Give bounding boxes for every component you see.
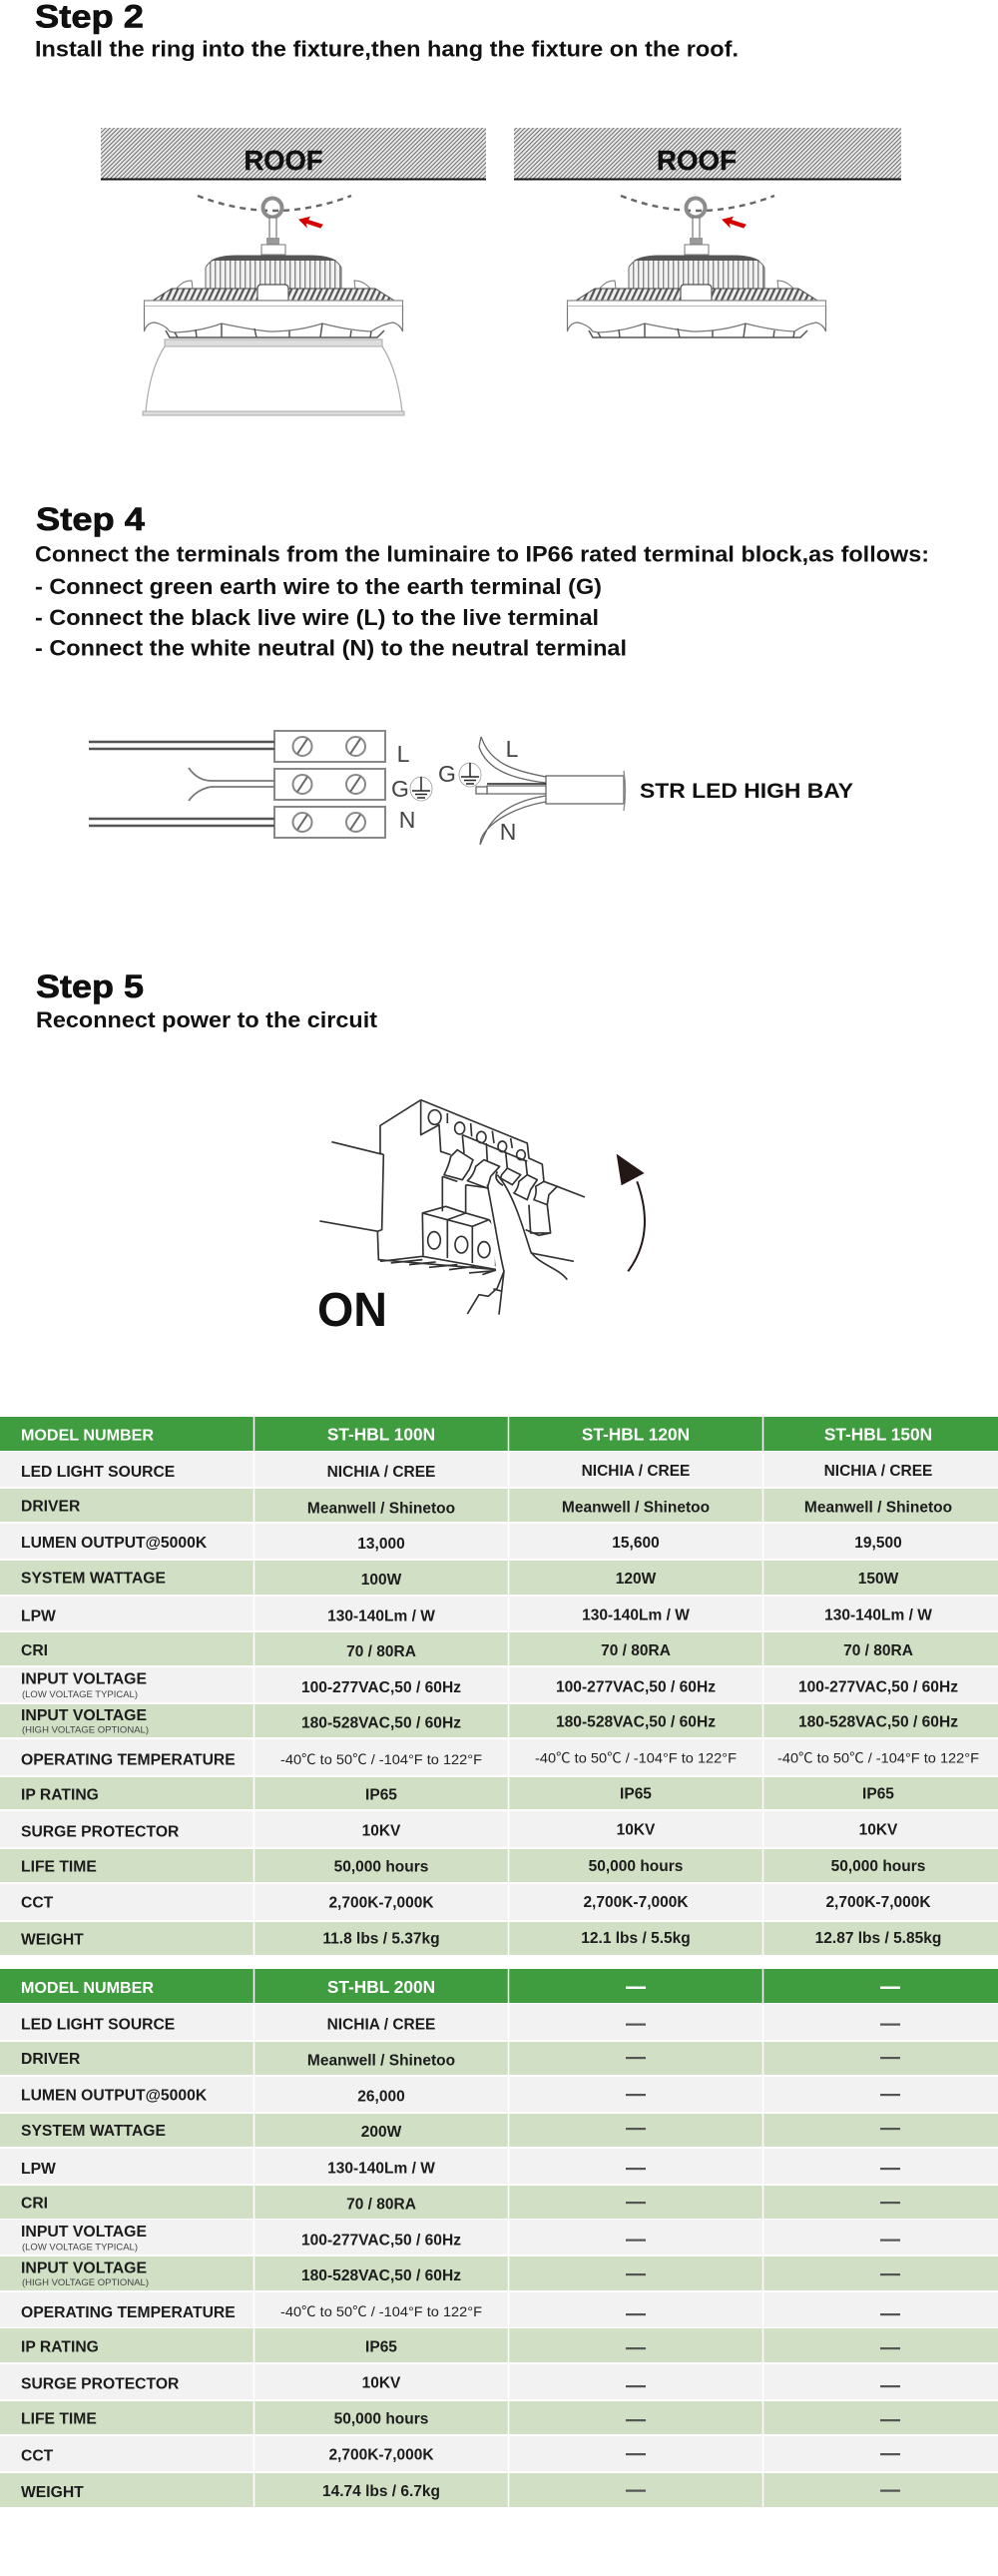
row: system wattage xyxy=(0,2114,998,2147)
row: input voltage low xyxy=(0,1667,998,1702)
row: LED light source: LED LIGHT SOURCE xyxy=(21,2017,175,2033)
row: driver: Meanwell / Shinetoo xyxy=(562,1500,710,1516)
row: weight: 12.1 lbs / 5.5kg xyxy=(581,1930,691,1947)
row: operating temperature: -40℃ to 50℃ / -104°F to 122°F xyxy=(777,1749,979,1765)
row: LED light source xyxy=(0,2004,998,2040)
row: CRI xyxy=(0,1632,998,1665)
row: input voltage high: INPUT VOLTAGE xyxy=(21,2260,147,2276)
wire labels: G xyxy=(438,761,456,787)
row: life time: 50,000 hours xyxy=(831,1858,925,1875)
heading: Step 4: Step 4 xyxy=(36,501,145,537)
row: weight: 12.87 lbs / 5.85kg xyxy=(815,1930,941,1947)
row: LPW xyxy=(0,2149,998,2184)
header row: ST-HBL 100N xyxy=(327,1424,435,1444)
table: specifications ST-HBL 200N xyxy=(0,1969,998,2507)
row: operating temperature xyxy=(0,2292,998,2327)
row: CRI: 70 / 80RA xyxy=(601,1642,671,1659)
heading: Step 5: Step 5 xyxy=(36,968,144,1004)
row: weight xyxy=(0,1922,998,1955)
row: operating temperature: -40℃ to 50℃ / -104°F to 122°F xyxy=(280,2303,482,2319)
row: life time: LIFE TIME xyxy=(21,1859,97,1875)
diagram: fixture with reflector hung from roof xyxy=(101,128,486,415)
icon: earth symbols xyxy=(410,763,481,801)
row: lumen output: LUMEN OUTPUT@5000K xyxy=(21,1535,208,1552)
row: driver: Meanwell / Shinetoo xyxy=(804,1500,952,1516)
row: weight: 11.8 lbs / 5.37kg xyxy=(322,1931,440,1947)
row: life time: LIFE TIME xyxy=(21,2410,97,2428)
row: life time xyxy=(0,1849,998,1882)
icon: high bay fixture without reflector xyxy=(567,196,826,337)
diagram: terminal block wiring xyxy=(89,731,853,845)
row: operating temperature: -40℃ to 50℃ / -104°F to 122°F xyxy=(535,1749,737,1765)
row: CCT xyxy=(0,1884,998,1920)
row: CCT: 2,700K-7,000K xyxy=(825,1894,931,1911)
row: CCT xyxy=(0,2436,998,2471)
row: lumen output: LUMEN OUTPUT@5000K xyxy=(21,2087,208,2105)
row: LPW: 130-140Lm / W xyxy=(327,1608,435,1625)
row: LPW: LPW xyxy=(21,1608,56,1625)
row: input voltage low xyxy=(0,2220,998,2254)
row: input voltage high: 180-528VAC,50 / 60Hz xyxy=(301,2267,461,2284)
text: Step 2 instruction: Install the ring into the fixture,then hang the fixture on the roof. xyxy=(35,36,739,62)
row: life time xyxy=(0,2401,998,2434)
diagram: fixture without reflector hung from roof xyxy=(514,128,901,337)
row: driver: Meanwell / Shinetoo xyxy=(307,1500,455,1518)
row: CRI: CRI xyxy=(21,2195,48,2213)
row: CCT: CCT xyxy=(21,2448,54,2464)
row: lumen output: 15,600 xyxy=(612,1535,660,1552)
row: driver xyxy=(0,1489,998,1522)
row: input voltage low: INPUT VOLTAGE xyxy=(21,2224,147,2241)
row: input voltage low: (LOW VOLTAGE TYPICAL) xyxy=(22,1689,138,1699)
row: input voltage high: 180-528VAC,50 / 60Hz xyxy=(556,1713,716,1731)
label: STR LED HIGH BAY: STR LED HIGH BAY xyxy=(640,780,853,803)
row: LPW: 130-140Lm / W xyxy=(582,1608,690,1623)
roof panel left: ROOF xyxy=(244,145,323,176)
row: input voltage high: INPUT VOLTAGE xyxy=(21,1707,147,1724)
row: input voltage high: (HIGH VOLTAGE OPTIONAL) xyxy=(22,2277,149,2287)
row: system wattage: 200W xyxy=(361,2124,402,2141)
header row: ST-HBL 200N xyxy=(327,1977,435,1997)
row: input voltage high: 180-528VAC,50 / 60Hz xyxy=(301,1715,461,1731)
row: LPW: 130-140Lm / W xyxy=(327,2161,435,2177)
row: driver xyxy=(0,2042,998,2075)
row: LED light source xyxy=(0,1452,998,1487)
row: CRI: 70 / 80RA xyxy=(346,2197,416,2213)
icon: high bay fixture with reflector xyxy=(143,196,404,415)
row: system wattage: 100W xyxy=(361,1572,402,1589)
row: IP rating: IP65 xyxy=(862,1785,894,1803)
roof panel right xyxy=(514,128,901,180)
row: IP rating: IP65 xyxy=(365,1787,397,1803)
row: lumen output xyxy=(0,2077,998,2112)
row: system wattage: 120W xyxy=(616,1571,657,1588)
wire labels: N xyxy=(399,807,415,833)
row: input voltage low: INPUT VOLTAGE xyxy=(21,1671,147,1687)
row: lumen output: 26,000 xyxy=(357,2089,405,2105)
wire labels: G xyxy=(391,776,409,802)
row: surge protector: SURGE PROTECTOR xyxy=(21,1823,179,1841)
row: IP rating xyxy=(0,1777,998,1809)
row: system wattage: 150W xyxy=(858,1571,899,1588)
header row xyxy=(0,1969,998,2003)
row: IP rating: IP RATING xyxy=(21,2338,99,2356)
row: weight: 14.74 lbs / 6.7kg xyxy=(322,2483,440,2500)
row: input voltage high xyxy=(0,2256,998,2290)
row: LED light source: NICHIA / CREE xyxy=(327,1464,435,1481)
row: CRI: CRI xyxy=(21,1642,48,1659)
roof panel left xyxy=(101,128,486,180)
row: operating temperature: OPERATING TEMPERATURE xyxy=(21,1751,236,1769)
row: operating temperature xyxy=(0,1739,998,1775)
input wires xyxy=(89,742,274,826)
row: surge protector: 10KV xyxy=(617,1821,656,1839)
row: system wattage xyxy=(0,1561,998,1595)
row: surge protector: 10KV xyxy=(859,1821,898,1839)
icon: breaker and hand xyxy=(319,1100,645,1315)
row: CRI: 70 / 80RA xyxy=(346,1643,416,1660)
row: LED light source: NICHIA / CREE xyxy=(327,2017,435,2033)
row: lumen output xyxy=(0,1524,998,1559)
row: lumen output: 19,500 xyxy=(854,1535,902,1552)
row: driver: DRIVER xyxy=(21,1498,80,1516)
row: LPW: LPW xyxy=(21,2161,56,2178)
row: input voltage high: (HIGH VOLTAGE OPTIONAL) xyxy=(22,1725,149,1735)
header row: ST-HBL 120N xyxy=(582,1424,690,1444)
wire labels xyxy=(391,736,519,845)
row: surge protector: 10KV xyxy=(362,2374,401,2392)
row: surge protector xyxy=(0,1811,998,1847)
header row: ST-HBL 150N xyxy=(824,1424,932,1444)
row: lumen output: 13,000 xyxy=(357,1536,405,1553)
table: specifications ST-HBL 100N 120N 150N xyxy=(0,1417,998,1955)
wire labels: L xyxy=(397,741,410,767)
text: Step 4 instructions: - Connect green earth wire to the earth terminal (G) xyxy=(35,574,602,599)
row: operating temperature: -40℃ to 50℃ / -104°F to 122°F xyxy=(280,1751,482,1767)
row: LPW: 130-140Lm / W xyxy=(824,1608,932,1623)
header row: MODEL NUMBER xyxy=(21,1980,154,1997)
row: input voltage low: 100-277VAC,50 / 60Hz xyxy=(798,1679,958,1695)
roof panel right: ROOF xyxy=(657,145,737,176)
row: input voltage low: 100-277VAC,50 / 60Hz xyxy=(301,1679,461,1696)
row: surge protector: 10KV xyxy=(362,1823,401,1839)
row: driver: Meanwell / Shinetoo xyxy=(307,2053,455,2069)
row: weight xyxy=(0,2473,998,2507)
row: weight: WEIGHT xyxy=(21,1931,84,1949)
row: CCT: 2,700K-7,000K xyxy=(583,1894,689,1911)
row: CCT: 2,700K-7,000K xyxy=(328,2446,434,2464)
row: surge protector xyxy=(0,2364,998,2399)
row: input voltage high xyxy=(0,1704,998,1737)
label: ON: ON xyxy=(317,1284,387,1337)
row: system wattage: SYSTEM WATTAGE xyxy=(21,2123,166,2140)
row: driver: DRIVER xyxy=(21,2051,80,2068)
text: Step 4 instructions: - Connect the white neutral (N) to the neutral terminal xyxy=(35,635,627,661)
wire labels: L xyxy=(506,736,519,762)
row: LED light source: LED LIGHT SOURCE xyxy=(21,1464,175,1481)
text: Step 4 instructions xyxy=(35,541,929,661)
cable with output wires xyxy=(476,737,625,845)
header row xyxy=(0,1417,998,1451)
row: CRI xyxy=(0,2186,998,2219)
row: input voltage low: 100-277VAC,50 / 60Hz xyxy=(556,1679,716,1695)
row: IP rating: IP65 xyxy=(620,1785,652,1803)
row: LPW xyxy=(0,1597,998,1630)
row: input voltage high: 180-528VAC,50 / 60Hz xyxy=(798,1713,958,1731)
wire labels: N xyxy=(500,819,516,845)
row: input voltage low: (LOW VOLTAGE TYPICAL) xyxy=(22,2243,138,2253)
row: life time: 50,000 hours xyxy=(589,1858,683,1875)
row: CCT: 2,700K-7,000K xyxy=(328,1895,434,1911)
row: life time: 50,000 hours xyxy=(334,2410,428,2428)
row: input voltage low: 100-277VAC,50 / 60Hz xyxy=(301,2233,461,2249)
row: CCT: CCT xyxy=(21,1895,54,1911)
row: IP rating: IP65 xyxy=(365,2338,397,2356)
row: surge protector: SURGE PROTECTOR xyxy=(21,2376,179,2392)
row: system wattage: SYSTEM WATTAGE xyxy=(21,1570,166,1588)
terminal blocks xyxy=(274,731,385,838)
header row: MODEL NUMBER xyxy=(21,1428,154,1444)
text: Step 4 instructions: - Connect the black live wire (L) to the live terminal xyxy=(35,605,599,630)
text: Step 4 instructions: Connect the terminals from the luminaire to IP66 rated terminal block,as follows: xyxy=(35,541,929,567)
row: IP rating xyxy=(0,2328,998,2362)
diagram: circuit breaker switched on xyxy=(317,1100,645,1337)
row: weight: WEIGHT xyxy=(21,2484,84,2501)
row: LED light source: NICHIA / CREE xyxy=(824,1463,932,1480)
row: operating temperature: OPERATING TEMPERATURE xyxy=(21,2304,236,2321)
text: Step 5 instruction: Reconnect power to the circuit xyxy=(36,1007,378,1032)
row: LED light source: NICHIA / CREE xyxy=(582,1463,690,1480)
row: IP rating: IP RATING xyxy=(21,1787,99,1803)
row: CRI: 70 / 80RA xyxy=(843,1642,913,1659)
row: life time: 50,000 hours xyxy=(334,1859,428,1875)
